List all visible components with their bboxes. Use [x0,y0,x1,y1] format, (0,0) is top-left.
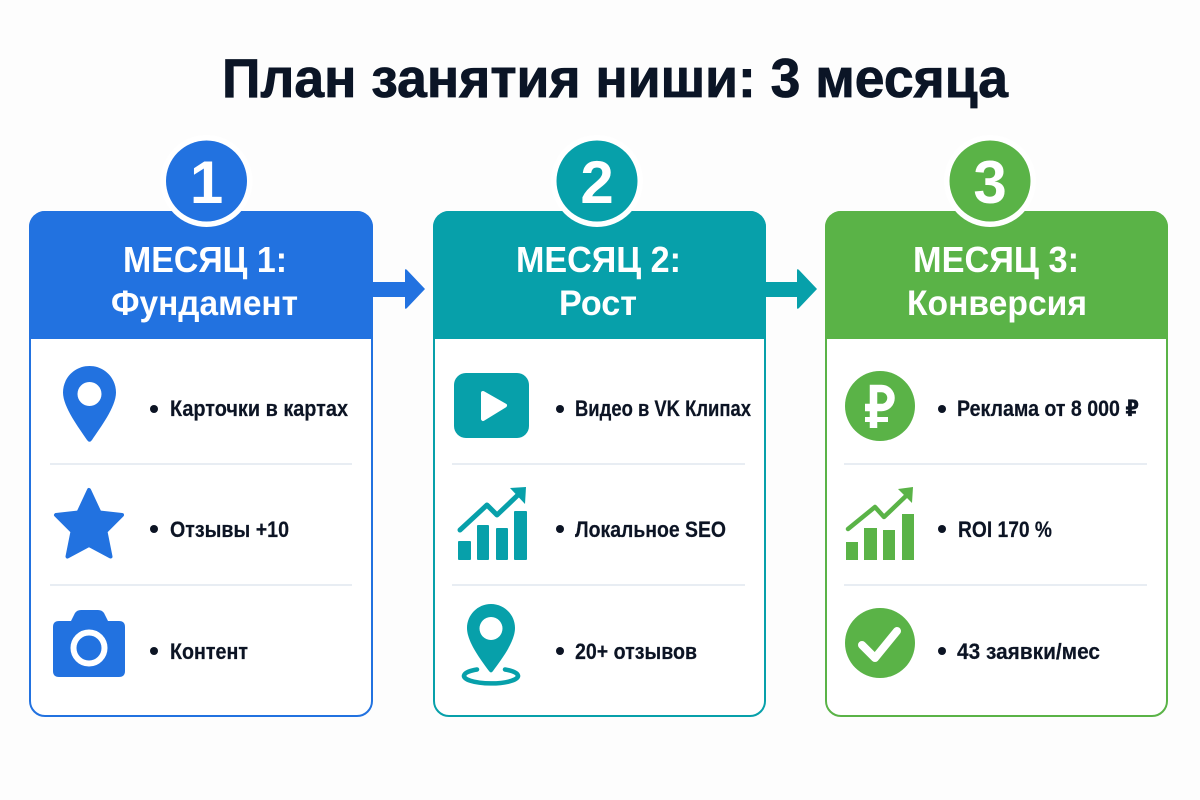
icon: map pin [63,366,116,442]
panel 2 header: Рост [559,284,637,323]
icon: camera [53,610,125,677]
panel 1 header: Фундамент [111,284,298,323]
arrow: month 2 to month 3 [765,269,817,309]
item: leads per month: 43 заявки/мес [957,639,1100,664]
icon: pin on ring [464,604,518,683]
number badge 1: 1 [190,149,223,216]
number badge 1 [160,135,252,227]
panel: month 2 [433,135,766,716]
icon: growth chart [458,487,527,560]
panel: month 1 [29,135,373,716]
panel 3 header: МЕСЯЦ 3: [913,239,1079,280]
item: content: Контент [170,639,248,664]
panel 1 header: МЕСЯЦ 1: [123,239,287,280]
item: VK clips: Видео в VK Клипах [575,396,751,421]
title: План занятия ниши: 3 месяца [222,47,1008,109]
panel: month 3 [825,135,1168,716]
item: local SEO: Локальное SEO [575,517,726,542]
panel 1 outline [30,212,372,716]
panel 2 header: МЕСЯЦ 2: [516,239,681,280]
panel 1 header [29,211,373,339]
icon: check circle [845,608,915,678]
icon: growth chart [846,487,914,560]
item: ad budget: Реклама от 8 000 ₽ [957,396,1139,421]
item: map cards: Карточки в картах [170,396,348,421]
number badge 2 [551,135,643,227]
item: 20+ reviews: 20+ отзывов [575,639,697,664]
item: ROI: ROI 170 % [958,517,1052,542]
panel 3 header: Конверсия [907,284,1087,323]
panel 3 outline [826,212,1167,716]
panel 2 outline [434,212,765,716]
icon: ruble coin [845,371,915,441]
icon: star [56,490,122,556]
number badge 3: 3 [973,149,1007,216]
arrow: month 1 to month 2 [372,269,425,309]
panel 3 header [825,211,1168,339]
item: reviews: Отзывы +10 [170,517,289,542]
number badge 3 [944,135,1036,227]
panel 2 header [433,211,766,339]
icon: video play [454,373,529,438]
number badge 2: 2 [580,149,614,216]
